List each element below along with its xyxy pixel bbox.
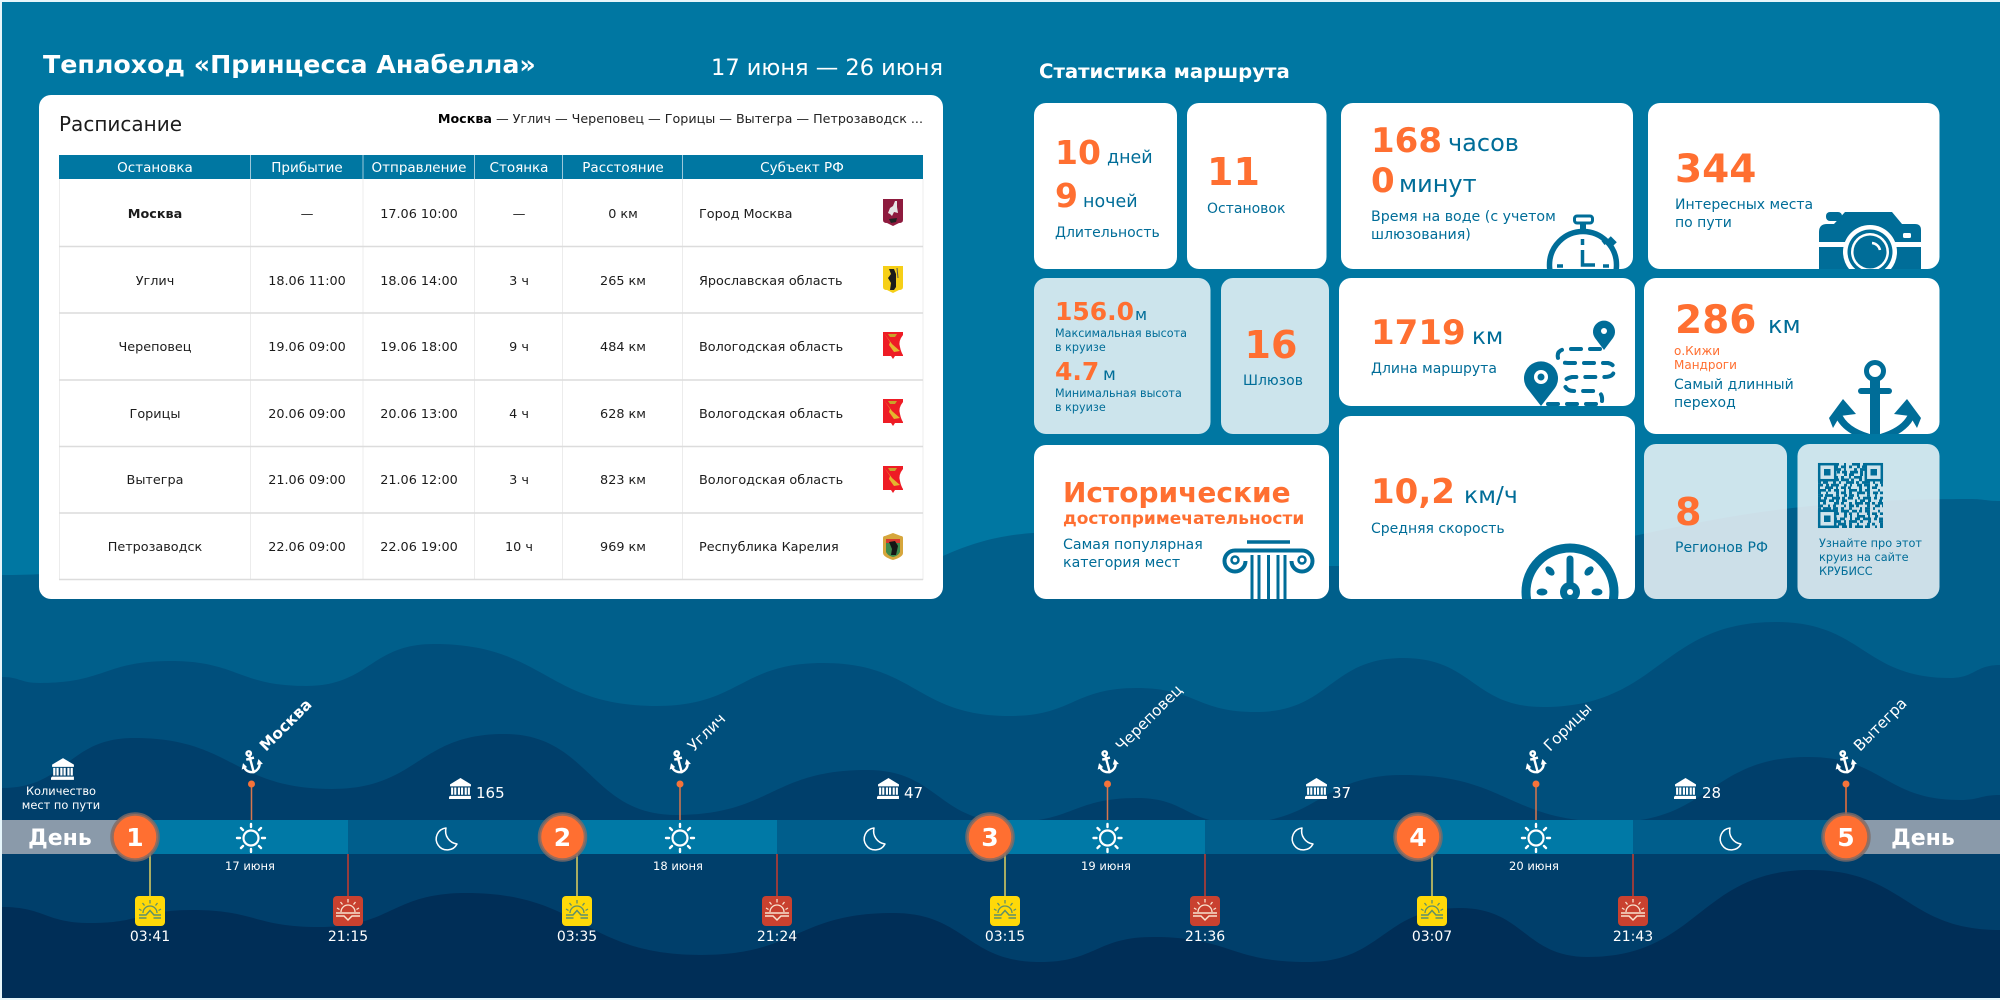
day 19 June: [1081, 824, 1131, 873]
row: Углич: 265 км: [600, 274, 646, 289]
QR code: [1818, 464, 1883, 527]
places count 165: [449, 778, 505, 802]
sunset 21:15: 21:15: [328, 929, 368, 945]
night icons: [436, 828, 1741, 850]
row: Череповец: Вологодская область: [699, 340, 843, 355]
day marker 5: [1823, 814, 1869, 860]
label: day left: День: [28, 826, 92, 851]
card: locks: Шлюзов: [1243, 373, 1303, 389]
sunset 21:43: 21:43: [1613, 929, 1653, 945]
day 17 June: 17 июня: [225, 859, 275, 873]
row: Вытегра: 823 км: [600, 473, 646, 488]
row: Горицы: 20.06 09:00: [268, 407, 346, 422]
card: time on water: минут: [1399, 170, 1477, 198]
sunset 21:15: [328, 896, 368, 945]
card: longest leg: о.Кижи: [1674, 344, 1720, 358]
sunset 21:36: [1185, 896, 1225, 945]
row: Углич: 3 ч: [509, 274, 529, 289]
card: heights: м: [1135, 305, 1147, 324]
card: average speed: км/ч: [1464, 481, 1518, 509]
card: average speed: Средняя скорость: [1371, 521, 1505, 537]
card: places: Интересных места: [1675, 197, 1813, 213]
route line: Москва — Углич — Череповец — Горицы — Вытегра — Петрозаводск ...: [438, 111, 923, 126]
card: route length: 1719: [1371, 313, 1466, 353]
day marker 2: [540, 814, 586, 860]
row: Горицы: Вологодская область: [699, 407, 843, 422]
row: Горицы: 4 ч: [509, 407, 529, 422]
card: longest leg: Самый длинный: [1674, 377, 1794, 393]
icon: anchor: [1829, 362, 1921, 439]
day marker 1: [112, 814, 158, 860]
day 17 June: [225, 824, 275, 873]
row: Череповец: 9 ч: [509, 340, 529, 355]
card: QR code: КРУБИСС: [1819, 565, 1873, 578]
card: QR code: [1798, 444, 1940, 599]
table header: Остановка: [117, 160, 193, 176]
card: popular category: категория мест: [1063, 555, 1180, 571]
row: Горицы: 20.06 13:00: [380, 407, 458, 422]
sunrise 03:41: 03:41: [130, 929, 170, 945]
card: duration: 9: [1055, 176, 1078, 215]
card: locks: [1221, 278, 1329, 434]
title: Теплоход «Принцесса Анабелла»: [43, 50, 536, 79]
row: Углич: 18.06 11:00: [268, 274, 346, 289]
table header: Расстояние: [582, 160, 664, 176]
row: Вытегра: 21.06 09:00: [268, 473, 346, 488]
legend: places count: Количество: [26, 784, 96, 798]
card: QR code: Узнайте про этот: [1819, 537, 1922, 550]
wave layer 3: [2, 734, 2000, 998]
sunset 21:36: 21:36: [1185, 929, 1225, 945]
card: longest leg: км: [1768, 311, 1801, 339]
card: places: [1648, 103, 1940, 279]
row: Череповец: 19.06 18:00: [380, 340, 458, 355]
places count 28: [1674, 778, 1721, 802]
stats heading: Статистика маршрута: [1039, 60, 1290, 83]
icon: stopwatch: [1546, 214, 1620, 269]
row: Череповец: Череповец: [119, 340, 192, 355]
row: Москва: 0 км: [608, 207, 638, 222]
card: average speed: [1339, 416, 1635, 599]
sunrise 03:35: [557, 896, 597, 945]
card: time on water: 168: [1371, 121, 1442, 161]
card: time on water: часов: [1448, 129, 1519, 157]
schedule heading: Расписание: [59, 112, 182, 136]
card: duration: 10: [1055, 133, 1101, 172]
row: Петрозаводск: 969 км: [600, 540, 646, 555]
card: heights: Минимальная высота: [1055, 387, 1182, 400]
row: Петрозаводск: Республика Карелия: [699, 540, 839, 555]
row: Москва: Город Москва: [699, 207, 793, 222]
row: Череповец: 19.06 09:00: [268, 340, 346, 355]
sunrise 03:15: [985, 896, 1025, 945]
wave layer 2: [2, 622, 2000, 998]
day marker 4: [1395, 814, 1441, 860]
card: time on water: 0: [1371, 161, 1395, 201]
card: regions: Регионов РФ: [1675, 540, 1768, 556]
row: Горицы: 628 км: [600, 407, 646, 422]
table header: Отправление: [372, 160, 466, 176]
row: Москва: Москва: [128, 207, 182, 222]
row: Петрозаводск: [108, 533, 903, 560]
card: regions: [1644, 444, 1787, 599]
stop: Москва: [238, 695, 316, 820]
icon: speedometer: [1522, 544, 1618, 599]
card: stops: [1187, 103, 1326, 269]
card: longest leg: 286: [1675, 298, 1756, 343]
row: Петрозаводск: 10 ч: [505, 540, 533, 555]
day marker 4: 4: [1409, 823, 1427, 852]
card: heights: м: [1103, 365, 1116, 385]
stop: Москва: Москва: [256, 695, 316, 755]
places count 28: 28: [1702, 784, 1721, 802]
card: heights: Максимальная высота: [1055, 327, 1187, 340]
legend: places count: [22, 758, 100, 812]
card: heights: 4.7: [1055, 357, 1099, 386]
card: places: по пути: [1675, 215, 1732, 231]
card: longest leg: [1644, 278, 1940, 439]
card: average speed: 10,2: [1371, 472, 1455, 512]
places count 165: 165: [476, 784, 505, 802]
day 18 June: [653, 824, 703, 873]
table header: Субъект РФ: [760, 160, 844, 176]
icon: column: [1224, 542, 1312, 600]
stop: Череповец: Череповец: [1112, 681, 1186, 755]
places count 37: [1305, 778, 1351, 802]
sunrise and sunset connectors: [150, 850, 1633, 896]
row: Вытегра: 3 ч: [509, 473, 529, 488]
row: Горицы: [130, 399, 903, 426]
card: heights: в круизе: [1055, 341, 1106, 354]
day marker 2: 2: [554, 823, 571, 852]
row: Вытегра: Вологодская область: [699, 473, 843, 488]
stop: Вытегра: Вытегра: [1850, 694, 1911, 755]
card: duration: дней: [1107, 148, 1153, 168]
panel: schedule: [39, 95, 943, 599]
row: Петрозаводск: 22.06 19:00: [380, 540, 458, 555]
card: popular category: Исторические: [1063, 476, 1291, 509]
icon: route map: [1524, 321, 1615, 406]
sunrise 03:35: 03:35: [557, 929, 597, 945]
card: longest leg: Мандроги: [1674, 358, 1737, 372]
card: time on water: шлюзования): [1371, 227, 1471, 243]
row: Москва: —: [301, 207, 314, 222]
label: day right: День: [1891, 826, 1955, 851]
wave layer 1: [2, 499, 2000, 998]
day 20 June: 20 июня: [1509, 859, 1559, 873]
card: route length: км: [1472, 324, 1503, 350]
card: heights: в круизе: [1055, 401, 1106, 414]
row: Вытегра: Вытегра: [127, 473, 183, 488]
card: route length: [1339, 278, 1635, 406]
day marker 3: [967, 814, 1013, 860]
table header: [59, 155, 923, 179]
table header: Стоянка: [490, 160, 548, 176]
row: Петрозаводск: Петрозаводск: [108, 540, 203, 555]
day marker 1: 1: [126, 823, 144, 852]
card: QR code: круиз на сайте: [1819, 551, 1909, 564]
row: Углич: [136, 266, 903, 293]
row: Москва: 17.06 10:00: [380, 207, 458, 222]
places count 47: [877, 778, 923, 802]
row: Углич: Ярославская область: [699, 274, 843, 289]
stop: Углич: Углич: [684, 710, 729, 755]
icon: camera: [1819, 212, 1921, 269]
card: longest leg: переход: [1674, 395, 1736, 411]
card: route length: Длина маршрута: [1371, 361, 1497, 377]
card: stops: Остановок: [1207, 201, 1285, 217]
card: stops: 11: [1207, 150, 1260, 194]
card: popular category: [1034, 445, 1329, 600]
row: Петрозаводск: 22.06 09:00: [268, 540, 346, 555]
row: Вытегра: [127, 466, 903, 493]
sunrise 03:07: [1412, 896, 1452, 945]
day 19 June: 19 июня: [1081, 859, 1131, 873]
stop: Череповец: [1094, 681, 1186, 820]
sunrise 03:07: 03:07: [1412, 929, 1452, 945]
row: Горицы: Горицы: [130, 407, 180, 422]
sunset 21:24: 21:24: [757, 929, 797, 945]
card: heights: [1034, 278, 1210, 434]
timeline band: [2, 820, 2000, 854]
cruise dates: 17 июня — 26 июня: [711, 55, 943, 81]
card: places: 344: [1675, 147, 1756, 192]
stop: Углич: [666, 710, 729, 820]
day marker 5: 5: [1837, 823, 1855, 852]
day 20 June: [1509, 824, 1559, 873]
places count 37: 37: [1332, 784, 1351, 802]
day marker 3: 3: [981, 823, 999, 852]
card: duration: [1034, 103, 1177, 269]
places count 47: 47: [904, 784, 923, 802]
sunset 21:43: [1613, 896, 1653, 945]
card: time on water: [1341, 103, 1633, 269]
row: Углич: Углич: [136, 274, 174, 289]
card: locks: 16: [1245, 323, 1297, 367]
card: duration: ночей: [1083, 192, 1138, 212]
card: time on water: Время на воде (с учетом: [1371, 209, 1556, 225]
row: Углич: 18.06 14:00: [380, 274, 458, 289]
card: regions: 8: [1675, 490, 1701, 534]
row: Вытегра: 21.06 12:00: [380, 473, 458, 488]
row: Череповец: 484 км: [600, 340, 646, 355]
stop: Горицы: Горицы: [1540, 699, 1596, 755]
sunrise 03:15: 03:15: [985, 929, 1025, 945]
sunset 21:24: [757, 896, 797, 945]
card: popular category: Самая популярная: [1063, 537, 1203, 553]
row: Москва: [128, 199, 903, 226]
legend: places count: мест по пути: [22, 798, 100, 812]
row: Череповец: [119, 332, 903, 359]
day 18 June: 18 июня: [653, 859, 703, 873]
row: Москва: —: [513, 207, 526, 222]
stop: Вытегра: [1832, 694, 1911, 820]
stop: Горицы: [1522, 699, 1596, 820]
card: popular category: достопримечательности: [1063, 509, 1304, 529]
card: heights: 156.0: [1055, 297, 1134, 326]
card: duration: Длительность: [1055, 225, 1160, 241]
table header: Прибытие: [271, 160, 343, 176]
sunrise 03:41: [130, 896, 170, 945]
wave layer 4: [2, 870, 2000, 998]
